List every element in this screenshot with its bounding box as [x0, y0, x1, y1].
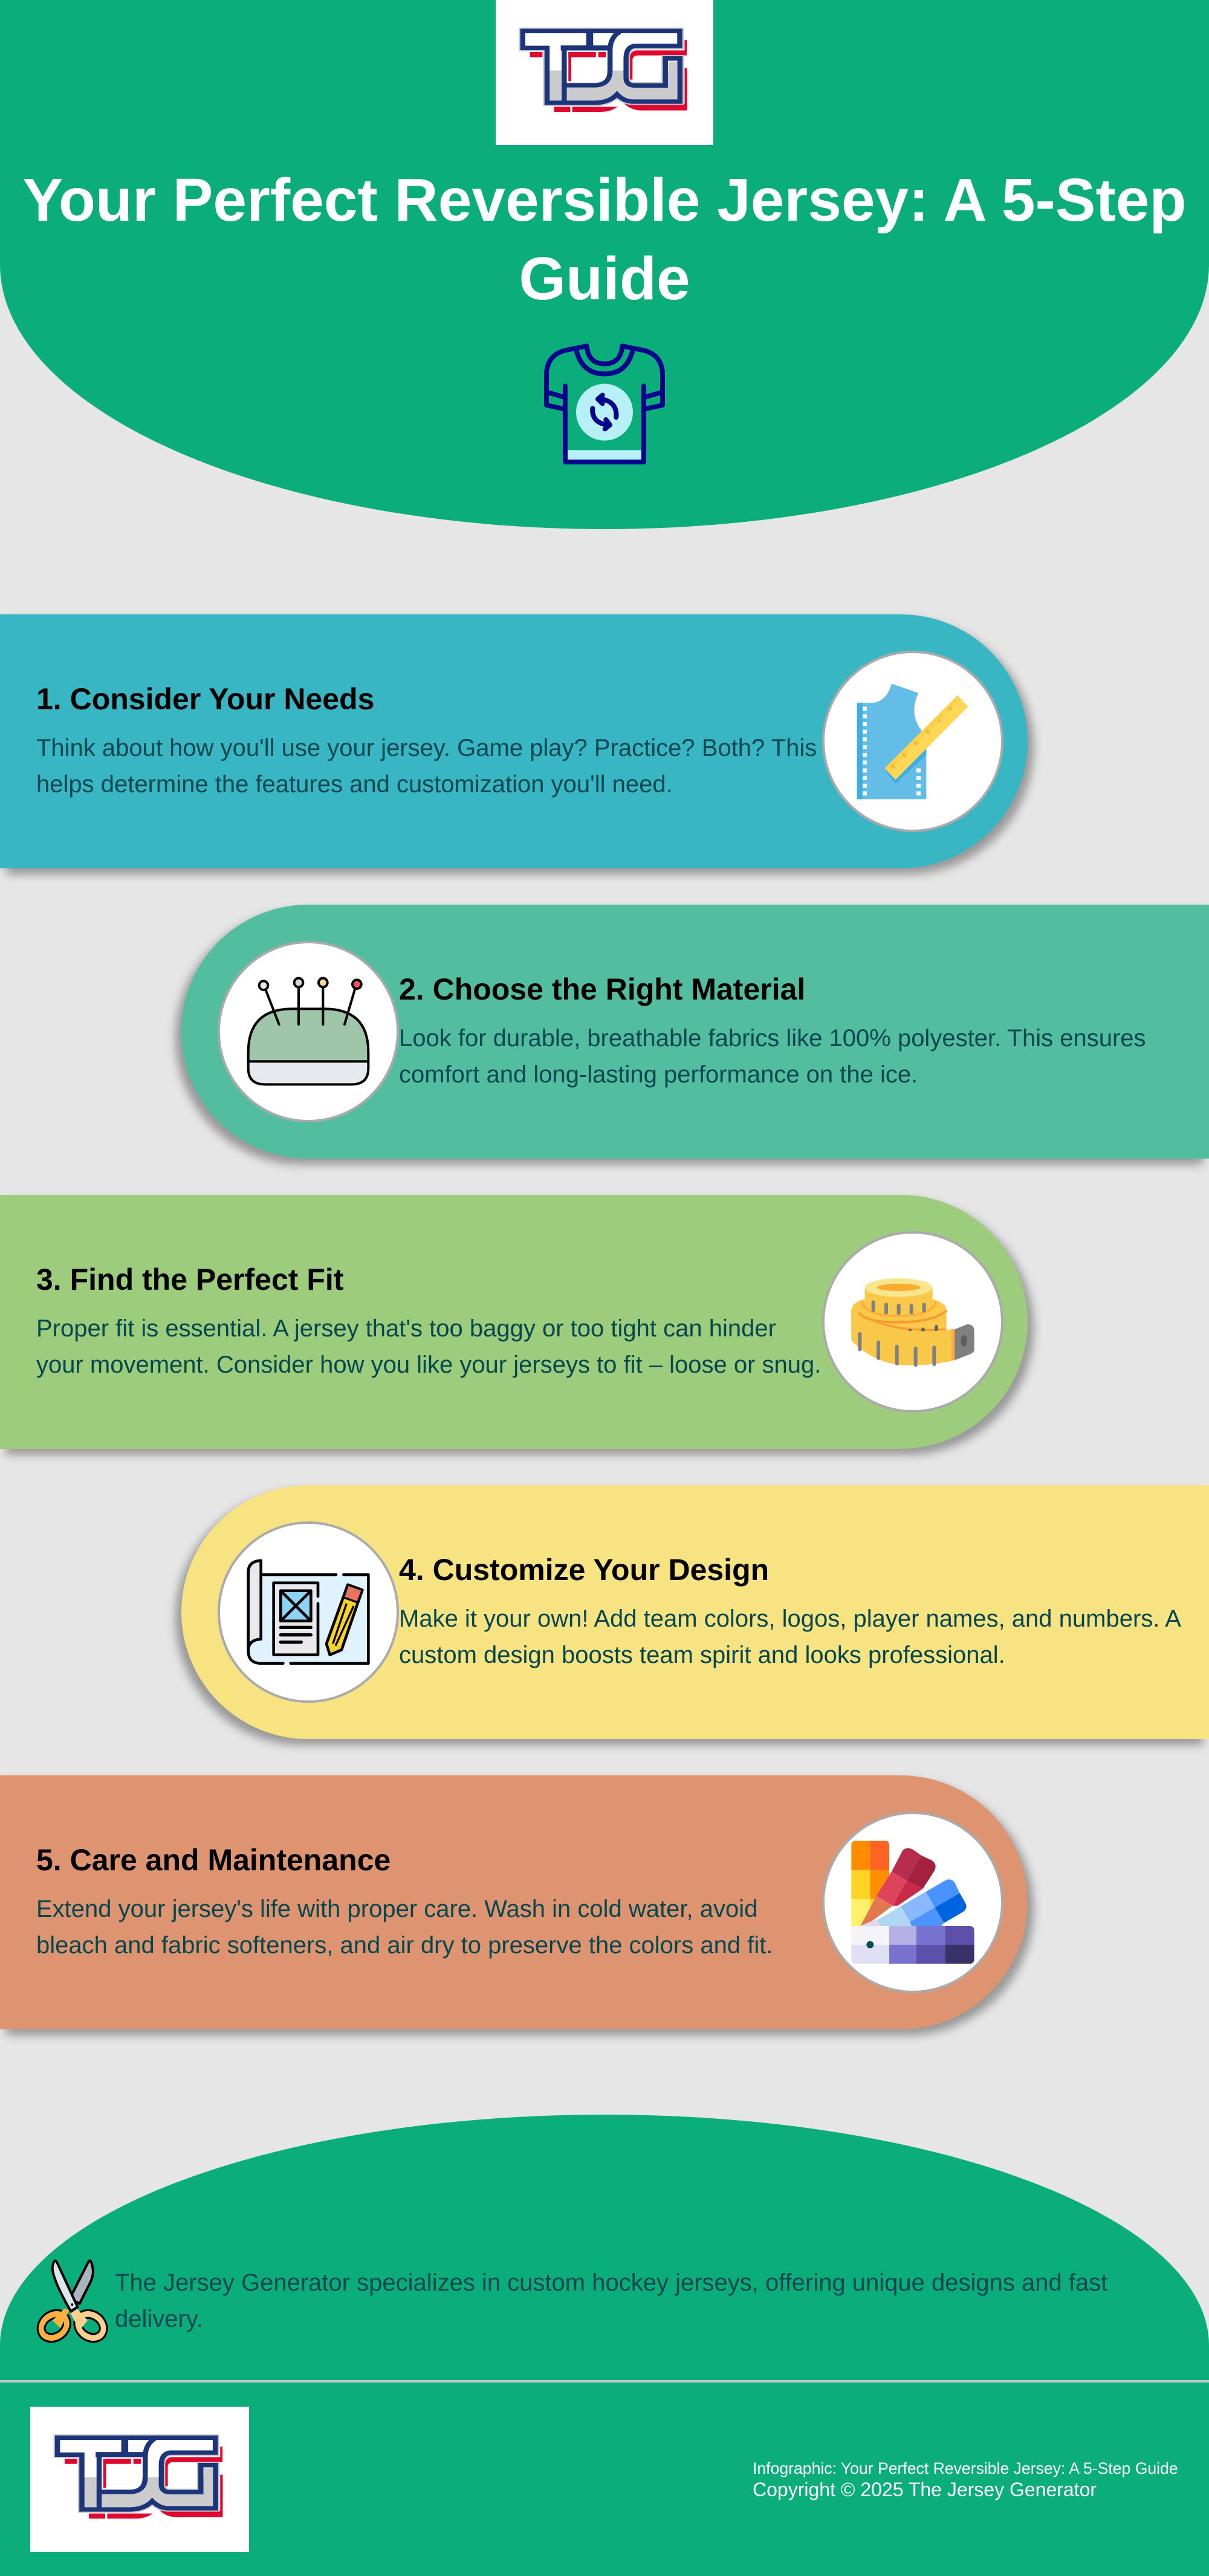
footer band: [0, 2115, 1209, 2576]
footer credits: Infographic: Your Perfect Reversible Jersey: A 5-Step Guide: [753, 2459, 1178, 2477]
heading: step 1: 1. Consider Your Needs: [36, 682, 374, 716]
text: step 2: Look for durable, breathable fabrics like 100% polyester. This ensures: [399, 1025, 1146, 1052]
text: step 3: Proper fit is essential. A jersey that's too baggy or too tight can hinder: [36, 1315, 776, 1342]
logo: TJG header: [496, 0, 713, 145]
text: step 5: [36, 1896, 773, 1959]
title: [23, 166, 1186, 313]
text: step 2: comfort and long-lasting performance on the ice.: [399, 1061, 918, 1088]
panel: step 1: [0, 614, 1028, 868]
text: company description: [115, 2269, 1107, 2332]
title: Guide: [519, 245, 690, 313]
text: step 5: bleach and fabric softeners, and air dry to preserve the colors and fit.: [36, 1932, 773, 1959]
panel: step 4: [181, 1485, 1209, 1739]
icon circle: pattern and ruler: [822, 651, 1003, 832]
text: step 4: Make it your own! Add team colors, logos, player names, and numbers. A: [399, 1605, 1181, 1632]
heading: step 2: 2. Choose the Right Material: [399, 972, 805, 1006]
panel: step 3: [0, 1195, 1028, 1449]
text: step 1: helps determine the features and customization you'll need.: [36, 771, 673, 798]
header band: [0, 0, 1209, 529]
panel: step 2: [181, 905, 1209, 1159]
icon: reversible shirt: [544, 343, 665, 464]
text: step 1: [36, 735, 817, 798]
text: step 1: Think about how you'll use your jersey. Game play? Practice? Both? This: [36, 735, 817, 761]
icon circle: color swatches: [822, 1812, 1003, 1993]
text: step 2: [399, 1025, 1146, 1088]
panel: step 5: [0, 1775, 1028, 2029]
text: step 5: Extend your jersey's life with proper care. Wash in cold water, avoid: [36, 1896, 757, 1922]
heading: step 5: 5. Care and Maintenance: [36, 1843, 391, 1877]
icon circle: pin cushion: [218, 941, 399, 1122]
title: Your Perfect Reversible Jersey: A 5-Step: [23, 166, 1186, 234]
text: step 4: custom design boosts team spirit and looks professional.: [399, 1642, 1005, 1668]
text: company description: The Jersey Generator specializes in custom hockey jerseys, offering unique designs and fast: [115, 2269, 1107, 2296]
icon: scissors: [36, 2259, 108, 2343]
text: step 4: [399, 1605, 1181, 1668]
logo: TJG footer: [30, 2407, 249, 2552]
heading: step 4: 4. Customize Your Design: [399, 1553, 769, 1587]
footer credits: [753, 2459, 1178, 2500]
footer credits: Copyright © 2025 The Jersey Generator: [753, 2479, 1097, 2500]
icon circle: measuring tape: [822, 1231, 1003, 1413]
text: company description: delivery.: [115, 2306, 203, 2332]
text: step 3: [36, 1315, 821, 1378]
footer divider line: [0, 2380, 1209, 2382]
icon circle: blueprint and pencil: [218, 1521, 399, 1703]
heading: step 3: 3. Find the Perfect Fit: [36, 1263, 343, 1296]
text: step 3: your movement. Consider how you like your jerseys to fit – loose or snug.: [36, 1351, 821, 1378]
